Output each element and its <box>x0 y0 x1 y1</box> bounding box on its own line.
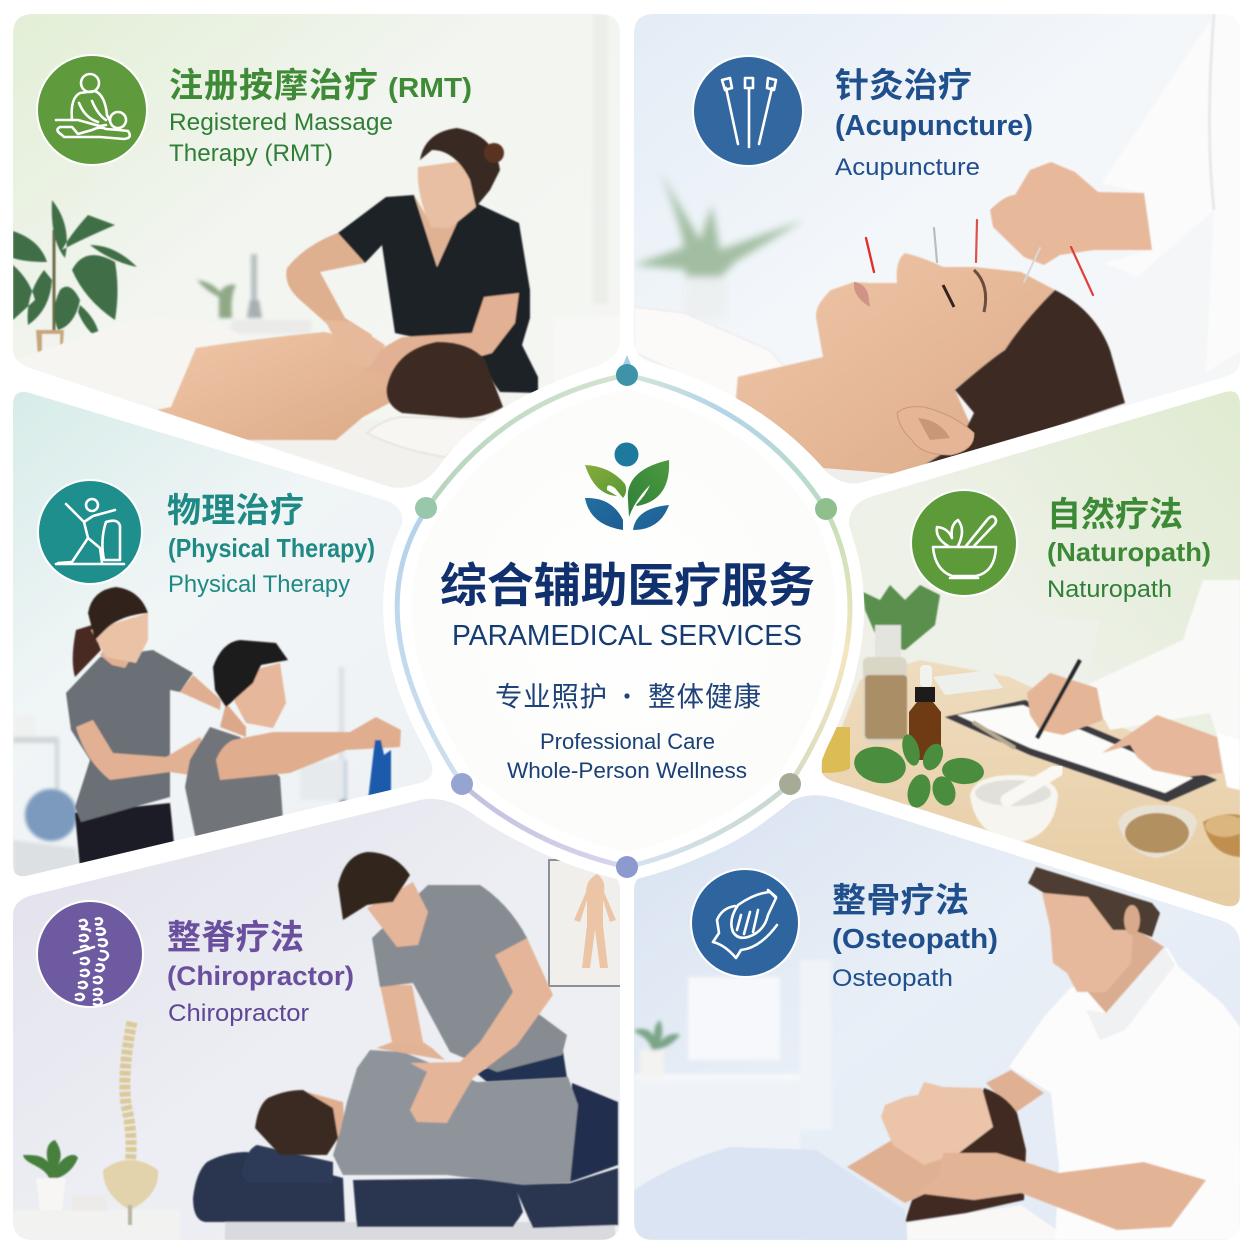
doctor hand <box>990 162 1152 265</box>
label: chiropractor: (Chiropractor) <box>167 961 354 991</box>
label: acupuncture: (Acupuncture) <box>835 110 1033 142</box>
icon: needles <box>693 56 803 166</box>
panel: acupuncture <box>634 14 1240 494</box>
english name: Acupuncture <box>835 154 980 181</box>
panel: registered massage therapy <box>13 14 624 495</box>
label: naturopath: (Naturopath) <box>1047 537 1211 567</box>
hub tagline english: Professional Care <box>540 729 715 754</box>
label: physical therapy: (Physical Therapy) <box>168 533 375 563</box>
anatomy chart <box>549 860 624 986</box>
hub white backing <box>397 375 850 867</box>
pillow <box>907 1205 1061 1240</box>
icon: stretching figure <box>38 480 142 584</box>
heading: 物理治疗 <box>167 492 304 530</box>
panel: physical therapy <box>13 388 443 883</box>
hub tagline chinese <box>495 681 761 712</box>
english name: Chiropractor <box>168 1000 309 1027</box>
window and cabinet <box>634 960 831 1240</box>
female therapist <box>66 587 221 868</box>
hub title chinese: 综合辅助医疗服务 <box>440 559 815 612</box>
table <box>810 660 1240 925</box>
seed bowls <box>1118 805 1245 858</box>
heading: (RMT) <box>388 72 472 103</box>
background plant <box>635 178 800 314</box>
fresh herbs <box>851 732 985 810</box>
side cabinet and plant <box>22 1139 106 1210</box>
lips eye brow <box>854 282 870 307</box>
icon: massage <box>37 55 147 165</box>
heading: 自然疗法 <box>1047 496 1183 534</box>
english name <box>169 109 393 167</box>
hub title english: PARAMEDICAL SERVICES <box>452 620 802 652</box>
room background <box>196 223 605 332</box>
panel: osteopath <box>634 790 1244 1245</box>
heading: 整脊疗法 <box>167 919 304 957</box>
patient back <box>157 332 395 440</box>
table <box>193 1145 618 1240</box>
potted plant <box>13 200 137 357</box>
label: acupuncture <box>693 56 1033 181</box>
massage table and pillow <box>366 416 486 458</box>
label: naturopath <box>911 490 1211 603</box>
label: chiropractor <box>37 901 354 1027</box>
face and neck <box>736 253 1055 480</box>
hub tagline chinese: 整体健康 <box>648 681 761 712</box>
spine model <box>103 1022 158 1225</box>
doctor coat <box>1208 14 1216 210</box>
notepad <box>933 670 1003 695</box>
heading: 注册按摩治疗 <box>169 67 378 105</box>
heading: 整骨疗法 <box>832 882 969 920</box>
hub tagline english <box>507 729 747 783</box>
label: osteopath <box>691 869 998 992</box>
needles <box>866 220 1093 295</box>
gym background <box>13 667 346 880</box>
hub ring <box>397 375 850 867</box>
therapist <box>286 128 538 393</box>
yellow jar <box>822 727 850 773</box>
panel: chiropractor <box>13 795 624 1245</box>
ear <box>897 407 974 455</box>
panel: naturopath <box>810 388 1245 925</box>
small herb plant and jar <box>863 585 940 743</box>
central hub <box>397 355 850 878</box>
patient hair <box>387 342 503 418</box>
patient <box>634 1082 1240 1240</box>
amber bottle <box>909 665 941 760</box>
english name: Naturopath <box>1047 576 1172 603</box>
hub tagline english: Whole-Person Wellness <box>507 758 747 783</box>
label: osteopath: (Osteopath) <box>832 923 998 954</box>
clipboard and paper <box>945 700 1217 802</box>
label: registered massage therapy <box>37 55 472 167</box>
pillow <box>824 468 892 484</box>
english name: Physical Therapy <box>168 571 350 598</box>
doctor sleeve <box>1000 580 1240 790</box>
label: physical therapy <box>38 480 375 598</box>
english name: Registered Massage <box>169 109 393 136</box>
writing hands <box>1027 660 1223 777</box>
hub tagline chinese: 专业照护 <box>495 681 607 712</box>
icon: spine <box>37 901 143 1007</box>
hair <box>924 289 1126 464</box>
towel <box>36 330 235 358</box>
icon: hands <box>691 869 799 977</box>
osteopath <box>986 867 1240 1240</box>
towel <box>634 306 784 374</box>
english name: Therapy (RMT) <box>169 140 333 167</box>
chiropractor <box>338 852 567 1082</box>
english name: Osteopath <box>832 965 953 992</box>
patient <box>255 938 618 1185</box>
logo <box>585 442 669 530</box>
hub ring nodes <box>415 355 837 878</box>
icon: mortar and herbs <box>911 490 1017 596</box>
heading <box>169 67 472 105</box>
male patient <box>185 640 401 840</box>
mortar and pestle <box>970 770 1058 842</box>
heading: 针灸治疗 <box>835 67 972 105</box>
